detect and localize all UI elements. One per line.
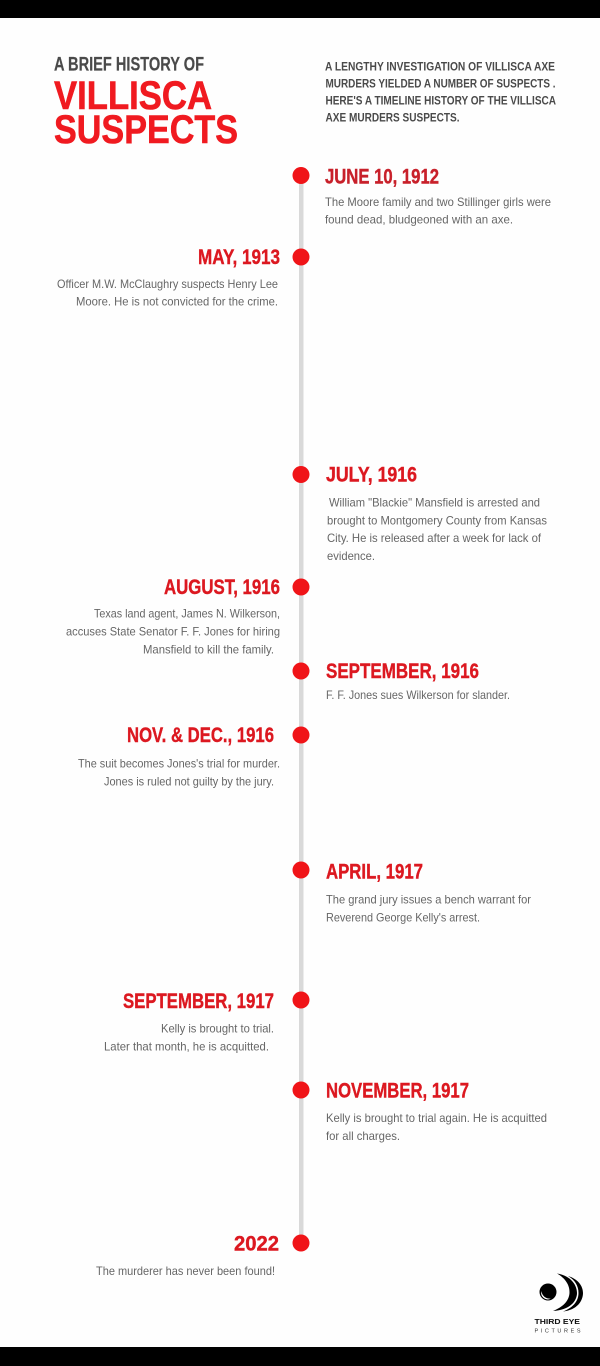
event: August, 1916	[66, 576, 280, 656]
marker: Nov. and Dec., 1916	[292, 726, 310, 744]
title: VILLISCA	[54, 74, 212, 118]
intro text	[325, 60, 556, 124]
event: 2022: 2022	[234, 1232, 279, 1256]
event: July, 1916	[326, 464, 547, 563]
event: August, 1916: Texas land agent, James N. Wilkerson,	[94, 606, 280, 620]
event: June 10, 1912: The Moore family and two Stillinger girls were	[325, 195, 551, 209]
event: July, 1916: City. He is released after a week for lack of	[327, 531, 542, 545]
marker: November, 1917	[292, 1082, 310, 1098]
event: 2022	[96, 1232, 279, 1278]
event: September, 1916: SEPTEMBER, 1916	[326, 660, 479, 683]
event: September, 1916	[326, 660, 510, 702]
event: July, 1916: JULY, 1916	[326, 464, 417, 487]
event: April, 1917: APRIL, 1917	[326, 860, 423, 884]
event: August, 1916: AUGUST, 1916	[164, 576, 280, 599]
event: September, 1917: SEPTEMBER, 1917	[123, 990, 274, 1013]
event: November, 1917: NOVEMBER, 1917	[326, 1080, 469, 1102]
event: April, 1917	[326, 860, 531, 924]
event: August, 1916: accuses State Senator F. F. Jones for hiring	[66, 624, 280, 638]
marker: September, 1916	[292, 662, 310, 680]
intro text: A LENGTHY INVESTIGATION OF VILLISCA AXE	[325, 60, 555, 74]
marker: July, 1916	[292, 466, 310, 483]
event: November, 1917	[326, 1080, 547, 1143]
marker: 2022	[292, 1234, 310, 1252]
event: July, 1916: evidence.	[327, 549, 375, 563]
event: May, 1913: Moore. He is not convicted for the crime.	[76, 294, 278, 308]
event: Nov. and Dec., 1916	[78, 724, 280, 788]
event: Nov. and Dec., 1916: The suit becomes Jones's trial for murder.	[78, 756, 280, 770]
intro text: MURDERS YIELDED A NUMBER OF SUSPECTS .	[326, 76, 556, 90]
title: SUSPECTS	[54, 108, 238, 152]
logo: Third Eye Pictures	[534, 1274, 583, 1334]
event: September, 1917	[104, 990, 274, 1053]
event: May, 1913: Officer M.W. McClaughry suspects Henry Lee	[57, 277, 278, 291]
event: November, 1917: for all charges.	[326, 1129, 400, 1143]
event: September, 1917: Kelly is brought to trial.	[161, 1021, 274, 1035]
marker: April, 1917	[292, 862, 310, 878]
event: November, 1917: Kelly is brought to trial again. He is acquitted	[326, 1111, 547, 1125]
event: Nov. and Dec., 1916: NOV. & DEC., 1916	[127, 724, 274, 747]
logo: Third Eye Pictures: THIRD EYE	[534, 1317, 580, 1326]
event: July, 1916: brought to Montgomery County from Kansas	[327, 513, 547, 527]
event: September, 1916: F. F. Jones sues Wilkerson for slander.	[326, 688, 510, 702]
intro text: AXE MURDERS SUSPECTS.	[326, 110, 460, 124]
title: A BRIEF HISTORY OF	[54, 54, 204, 76]
event: August, 1916: Mansfield to kill the family.	[143, 642, 274, 656]
event: June 10, 1912: JUNE 10, 1912	[325, 166, 439, 188]
intro text: HERE'S A TIMELINE HISTORY OF THE VILLISCA	[326, 94, 556, 108]
marker: May, 1913	[292, 248, 310, 266]
event: September, 1917: Later that month, he is acquitted.	[104, 1039, 269, 1053]
event: June 10, 1912	[325, 166, 551, 226]
event: April, 1917: Reverend George Kelly's arrest.	[326, 910, 480, 924]
marker: June 10, 1912	[292, 167, 310, 184]
event: 2022: The murderer has never been found!	[96, 1264, 275, 1278]
event: May, 1913	[57, 246, 280, 308]
title	[54, 54, 238, 152]
marker: September, 1917	[292, 992, 310, 1008]
logo: Third Eye Pictures: PICTURES	[534, 1328, 581, 1334]
event: May, 1913: MAY, 1913	[198, 246, 280, 269]
marker: August, 1916	[292, 578, 310, 596]
event: Nov. and Dec., 1916: Jones is ruled not guilty by the jury.	[104, 774, 274, 788]
event: April, 1917: The grand jury issues a bench warrant for	[326, 892, 531, 906]
event: July, 1916: William "Blackie" Mansfield is arrested and	[329, 495, 540, 509]
event: June 10, 1912: found dead, bludgeoned with an axe.	[325, 212, 513, 226]
timeline spine	[299, 175, 304, 1243]
